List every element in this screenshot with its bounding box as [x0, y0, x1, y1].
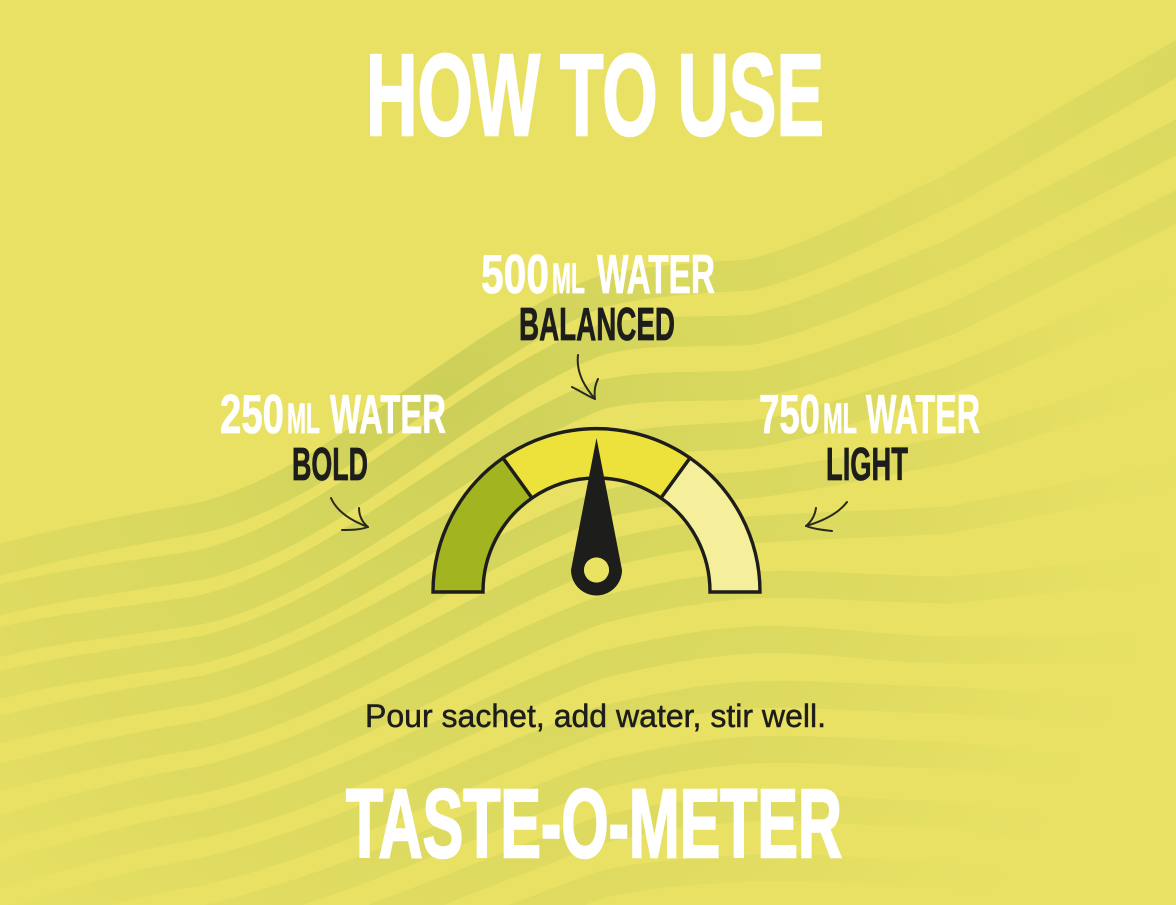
instruction text: Pour sachet, add water, stir well.: [365, 698, 826, 734]
label: 750ml water light: ML: [823, 395, 857, 443]
arrow: to bold: [331, 498, 368, 530]
gauge needle: [571, 438, 622, 596]
gauge needle hub: [584, 558, 609, 582]
label: 250ml water bold: ML: [287, 395, 320, 443]
label: 500ml water balanced: 500: [481, 243, 549, 305]
label: 250ml water bold: BOLD: [292, 438, 368, 490]
label: 750ml water light: [759, 383, 980, 490]
label: 250ml water bold: [220, 383, 446, 490]
label: 500ml water balanced: ML: [552, 255, 585, 303]
label: 750ml water light: LIGHT: [826, 438, 908, 490]
label: 500ml water balanced: WATER: [597, 243, 715, 305]
label: 750ml water light: WATER: [866, 383, 980, 445]
gauge: [433, 429, 760, 596]
arrow: to light: [806, 502, 847, 531]
gauge segment: balanced: [503, 429, 690, 498]
label: 250ml water bold: 250: [220, 383, 284, 445]
gauge segment: bold: [433, 458, 532, 592]
label: 500ml water balanced: [481, 243, 715, 350]
label: 750ml water light: 750: [759, 383, 820, 445]
title: taste-o-meter: TASTE-O-METER: [346, 769, 842, 878]
arrow: to balanced: [572, 355, 598, 399]
title: how to use: HOW TO USE: [366, 30, 824, 160]
gauge segment: light: [661, 458, 760, 592]
label: 500ml water balanced: BALANCED: [519, 298, 675, 350]
label: 250ml water bold: WATER: [330, 383, 446, 445]
